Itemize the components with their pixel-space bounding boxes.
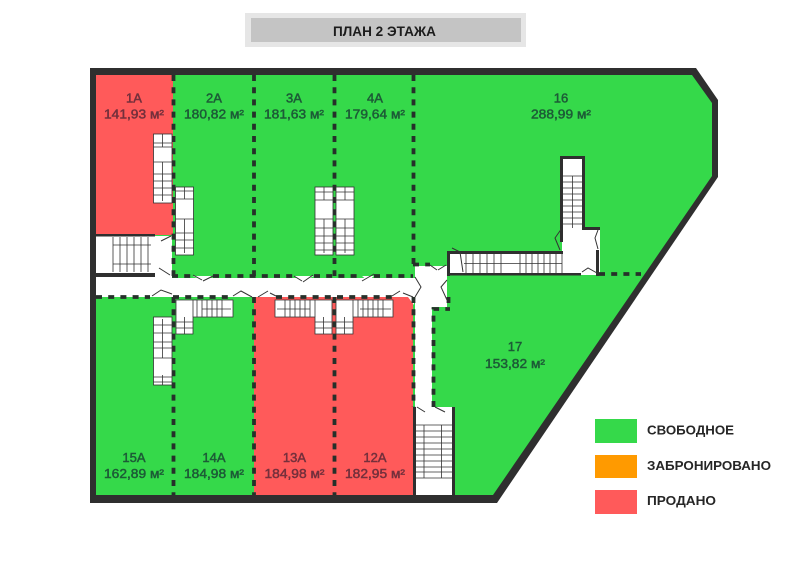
unit 12A sold: [334, 297, 413, 495]
label: 16: [531, 90, 592, 122]
title: ПЛАН 2 ЭТАЖА: [333, 24, 436, 39]
label: 14A: 184,98 м²: [184, 466, 245, 481]
label: 15A: [104, 450, 165, 481]
label: 17: 153,82 м²: [485, 356, 546, 371]
label: 2A: [184, 90, 245, 122]
label: 4A: [345, 90, 406, 122]
interior walls: [96, 156, 600, 497]
stair: south exit: [416, 425, 452, 478]
label: 17: 17: [508, 339, 522, 354]
label: 15A: 15A: [122, 450, 146, 465]
legend item: sold: [595, 490, 716, 514]
label: 13A: 13A: [283, 450, 306, 465]
label: 13A: [264, 450, 325, 481]
label: 3A: 181,63 м²: [264, 106, 325, 122]
label: 1A: 141,93 м²: [104, 106, 165, 122]
label: 16: 288,99 м²: [531, 106, 592, 122]
stair: unit 15A: [154, 317, 172, 385]
label: 15A: 162,89 м²: [104, 466, 165, 481]
stair: unit 12A: [336, 300, 393, 334]
label: 1A: 1A: [126, 90, 142, 106]
legend item: reserved: ЗАБРОНИРОВАНО: [647, 458, 771, 473]
label: 17: [485, 339, 546, 371]
outer wall: [90, 68, 718, 503]
label: 1A: [104, 90, 165, 122]
stair: tower: [563, 176, 582, 228]
stair: unit 1A: [154, 134, 172, 203]
label: 3A: 3A: [286, 90, 302, 106]
label: 2A: 180,82 м²: [184, 106, 245, 122]
label: 3A: [264, 90, 325, 122]
stair: left lobby: [113, 237, 151, 272]
label: 2A: 2A: [206, 90, 222, 106]
corridors: [96, 159, 600, 495]
title: [245, 13, 526, 47]
legend item: free: [595, 419, 734, 443]
label: 4A: 4A: [367, 90, 383, 106]
stair: east corridor: [464, 254, 562, 273]
label: 13A: 184,98 м²: [264, 466, 325, 481]
unit 13A sold: [254, 297, 334, 495]
label: 14A: [184, 450, 245, 481]
label: 16: 16: [554, 90, 568, 106]
floor plan: [90, 68, 718, 503]
unit 1A sold: [96, 75, 173, 235]
legend: [595, 419, 771, 514]
label: 4A: 179,64 м²: [345, 106, 406, 122]
legend item: reserved: [595, 455, 771, 478]
stair: unit 2A: [176, 187, 194, 255]
building floor: [96, 75, 712, 495]
label: 14A: 14A: [202, 450, 226, 465]
label: 12A: 12A: [363, 450, 387, 465]
legend item: sold: ПРОДАНО: [647, 493, 716, 508]
dashed partitions: [96, 75, 641, 495]
stair: unit 13A: [275, 300, 332, 334]
stair: unit 14A: [176, 300, 233, 334]
label: 12A: 182,95 м²: [345, 466, 406, 481]
stair: unit 3A: [315, 187, 333, 255]
doors: [152, 228, 598, 412]
legend item: free: СВОБОДНОЕ: [647, 422, 734, 438]
stair: unit 4A: [336, 187, 354, 255]
label: 12A: [345, 450, 406, 481]
